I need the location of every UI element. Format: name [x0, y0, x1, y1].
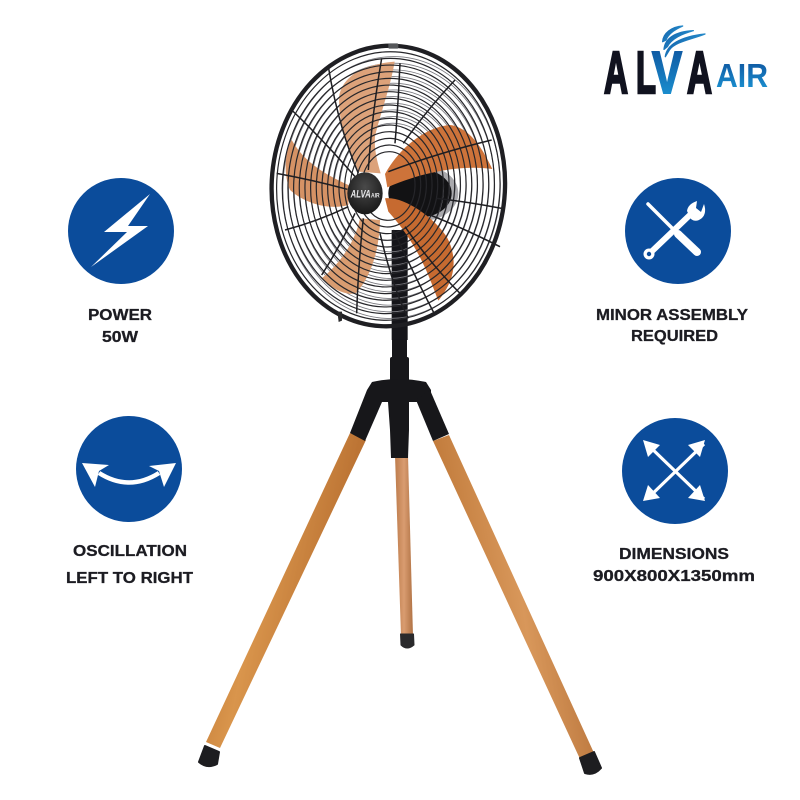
blade: top — [339, 62, 395, 173]
blades — [286, 62, 492, 301]
label: power: POWER — [88, 307, 152, 324]
hub with brand: AIR — [371, 194, 380, 200]
logo wordmark: L — [636, 40, 656, 106]
label: dimensions: 900X800X1350mm — [593, 568, 755, 585]
label: power — [88, 307, 152, 346]
label: assembly: REQUIRED — [631, 328, 718, 345]
logo: Alva Air — [604, 26, 768, 106]
label: dimensions: DIMENSIONS — [619, 546, 729, 563]
icon: lightning bolt — [68, 178, 174, 284]
pole — [392, 230, 408, 340]
blade: bottom left — [322, 218, 380, 294]
label: assembly: MINOR ASSEMBLY — [596, 307, 748, 324]
label: dimensions — [593, 546, 755, 585]
logo wordmark — [604, 40, 768, 106]
label: oscillation: OSCILLATION — [73, 543, 187, 560]
logo feathers — [663, 26, 705, 57]
right leg — [433, 435, 601, 774]
feature: assembly — [596, 178, 748, 345]
feature: dimensions — [593, 418, 755, 585]
tripod bracket — [350, 335, 449, 458]
blade: bottom right — [385, 198, 454, 301]
label: oscillation — [66, 543, 193, 587]
icon: curved double arrow — [76, 416, 182, 522]
logo wordmark: V — [652, 40, 682, 106]
centre leg — [395, 455, 414, 648]
blade: left — [286, 140, 348, 207]
label: oscillation: LEFT TO RIGHT — [66, 570, 193, 587]
hub with brand: ALVA — [350, 189, 371, 201]
outer rim — [264, 40, 512, 332]
logo wordmark: AIR — [716, 57, 768, 94]
hub with brand — [347, 172, 383, 214]
rim latch — [337, 312, 342, 322]
motor — [388, 166, 458, 221]
fan head — [264, 40, 512, 340]
icon: crossed double arrows — [622, 418, 728, 524]
grille spokes — [277, 58, 502, 318]
label: assembly — [596, 307, 748, 345]
blade: top right — [385, 125, 492, 187]
icon: crossed wrench and screwdriver — [625, 178, 731, 284]
grille rings — [270, 46, 507, 326]
tripod legs — [199, 335, 601, 774]
feature: power — [68, 178, 174, 346]
rim clip — [388, 43, 398, 49]
back grille rings — [276, 51, 507, 324]
label: power: 50W — [102, 329, 139, 346]
left leg — [199, 433, 366, 766]
feature: oscillation — [66, 416, 193, 587]
logo wordmark: A — [687, 40, 712, 106]
logo wordmark: A — [604, 40, 628, 106]
